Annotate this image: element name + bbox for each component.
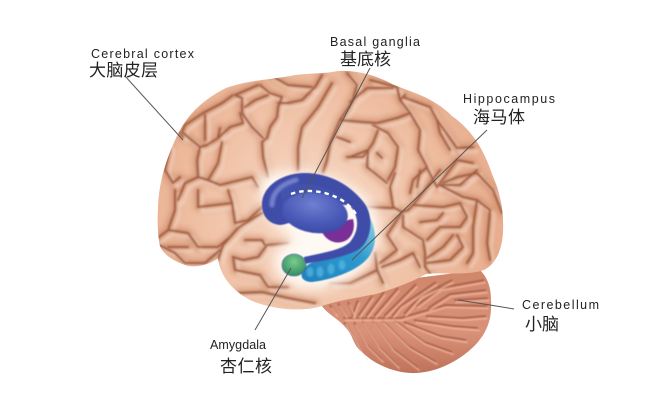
brain illustration: [155, 71, 506, 373]
label: cerebral cortex: Cerebral cortex: [91, 47, 195, 61]
label: amygdala: 杏仁核: [220, 357, 272, 376]
label: hippocampus: [463, 92, 555, 127]
amygdala: [282, 254, 306, 276]
hippocampus: [301, 218, 375, 282]
leader: amygdala: [255, 268, 291, 330]
label: basal ganglia: Basal ganglia: [330, 35, 420, 49]
leader lines: [125, 68, 514, 330]
label: hippocampus: 海马体: [473, 108, 525, 127]
leader: cerebellum: [458, 300, 514, 309]
label: amygdala: [210, 338, 272, 376]
lentiform nucleus: [280, 189, 350, 237]
purple structure: [322, 219, 354, 243]
leader: basal ganglia: [302, 68, 370, 198]
label: amygdala: Amygdala: [210, 338, 266, 352]
caudate highlight: [272, 180, 296, 205]
cerebral cortex: [155, 71, 506, 309]
hippocampus lobes: [306, 260, 346, 278]
leader: hippocampus: [352, 130, 487, 260]
caudate upper band fill: [280, 184, 350, 215]
label: basal ganglia: [330, 35, 420, 69]
label: cerebellum: [522, 298, 599, 334]
dashed white gap: [291, 191, 356, 214]
leader: cerebral cortex: [125, 76, 183, 140]
label: cerebellum: 小脑: [525, 315, 559, 334]
label: cerebral cortex: 大脑皮层: [89, 61, 158, 80]
cerebellum: [320, 270, 491, 373]
label: hippocampus: Hippocampus: [463, 92, 555, 106]
basal ganglia caudate: [262, 173, 370, 264]
white glow around deep structures: [260, 171, 379, 289]
label: cerebellum: Cerebellum: [522, 298, 599, 312]
label: basal ganglia: 基底核: [340, 50, 391, 69]
label: cerebral cortex: [89, 47, 195, 80]
